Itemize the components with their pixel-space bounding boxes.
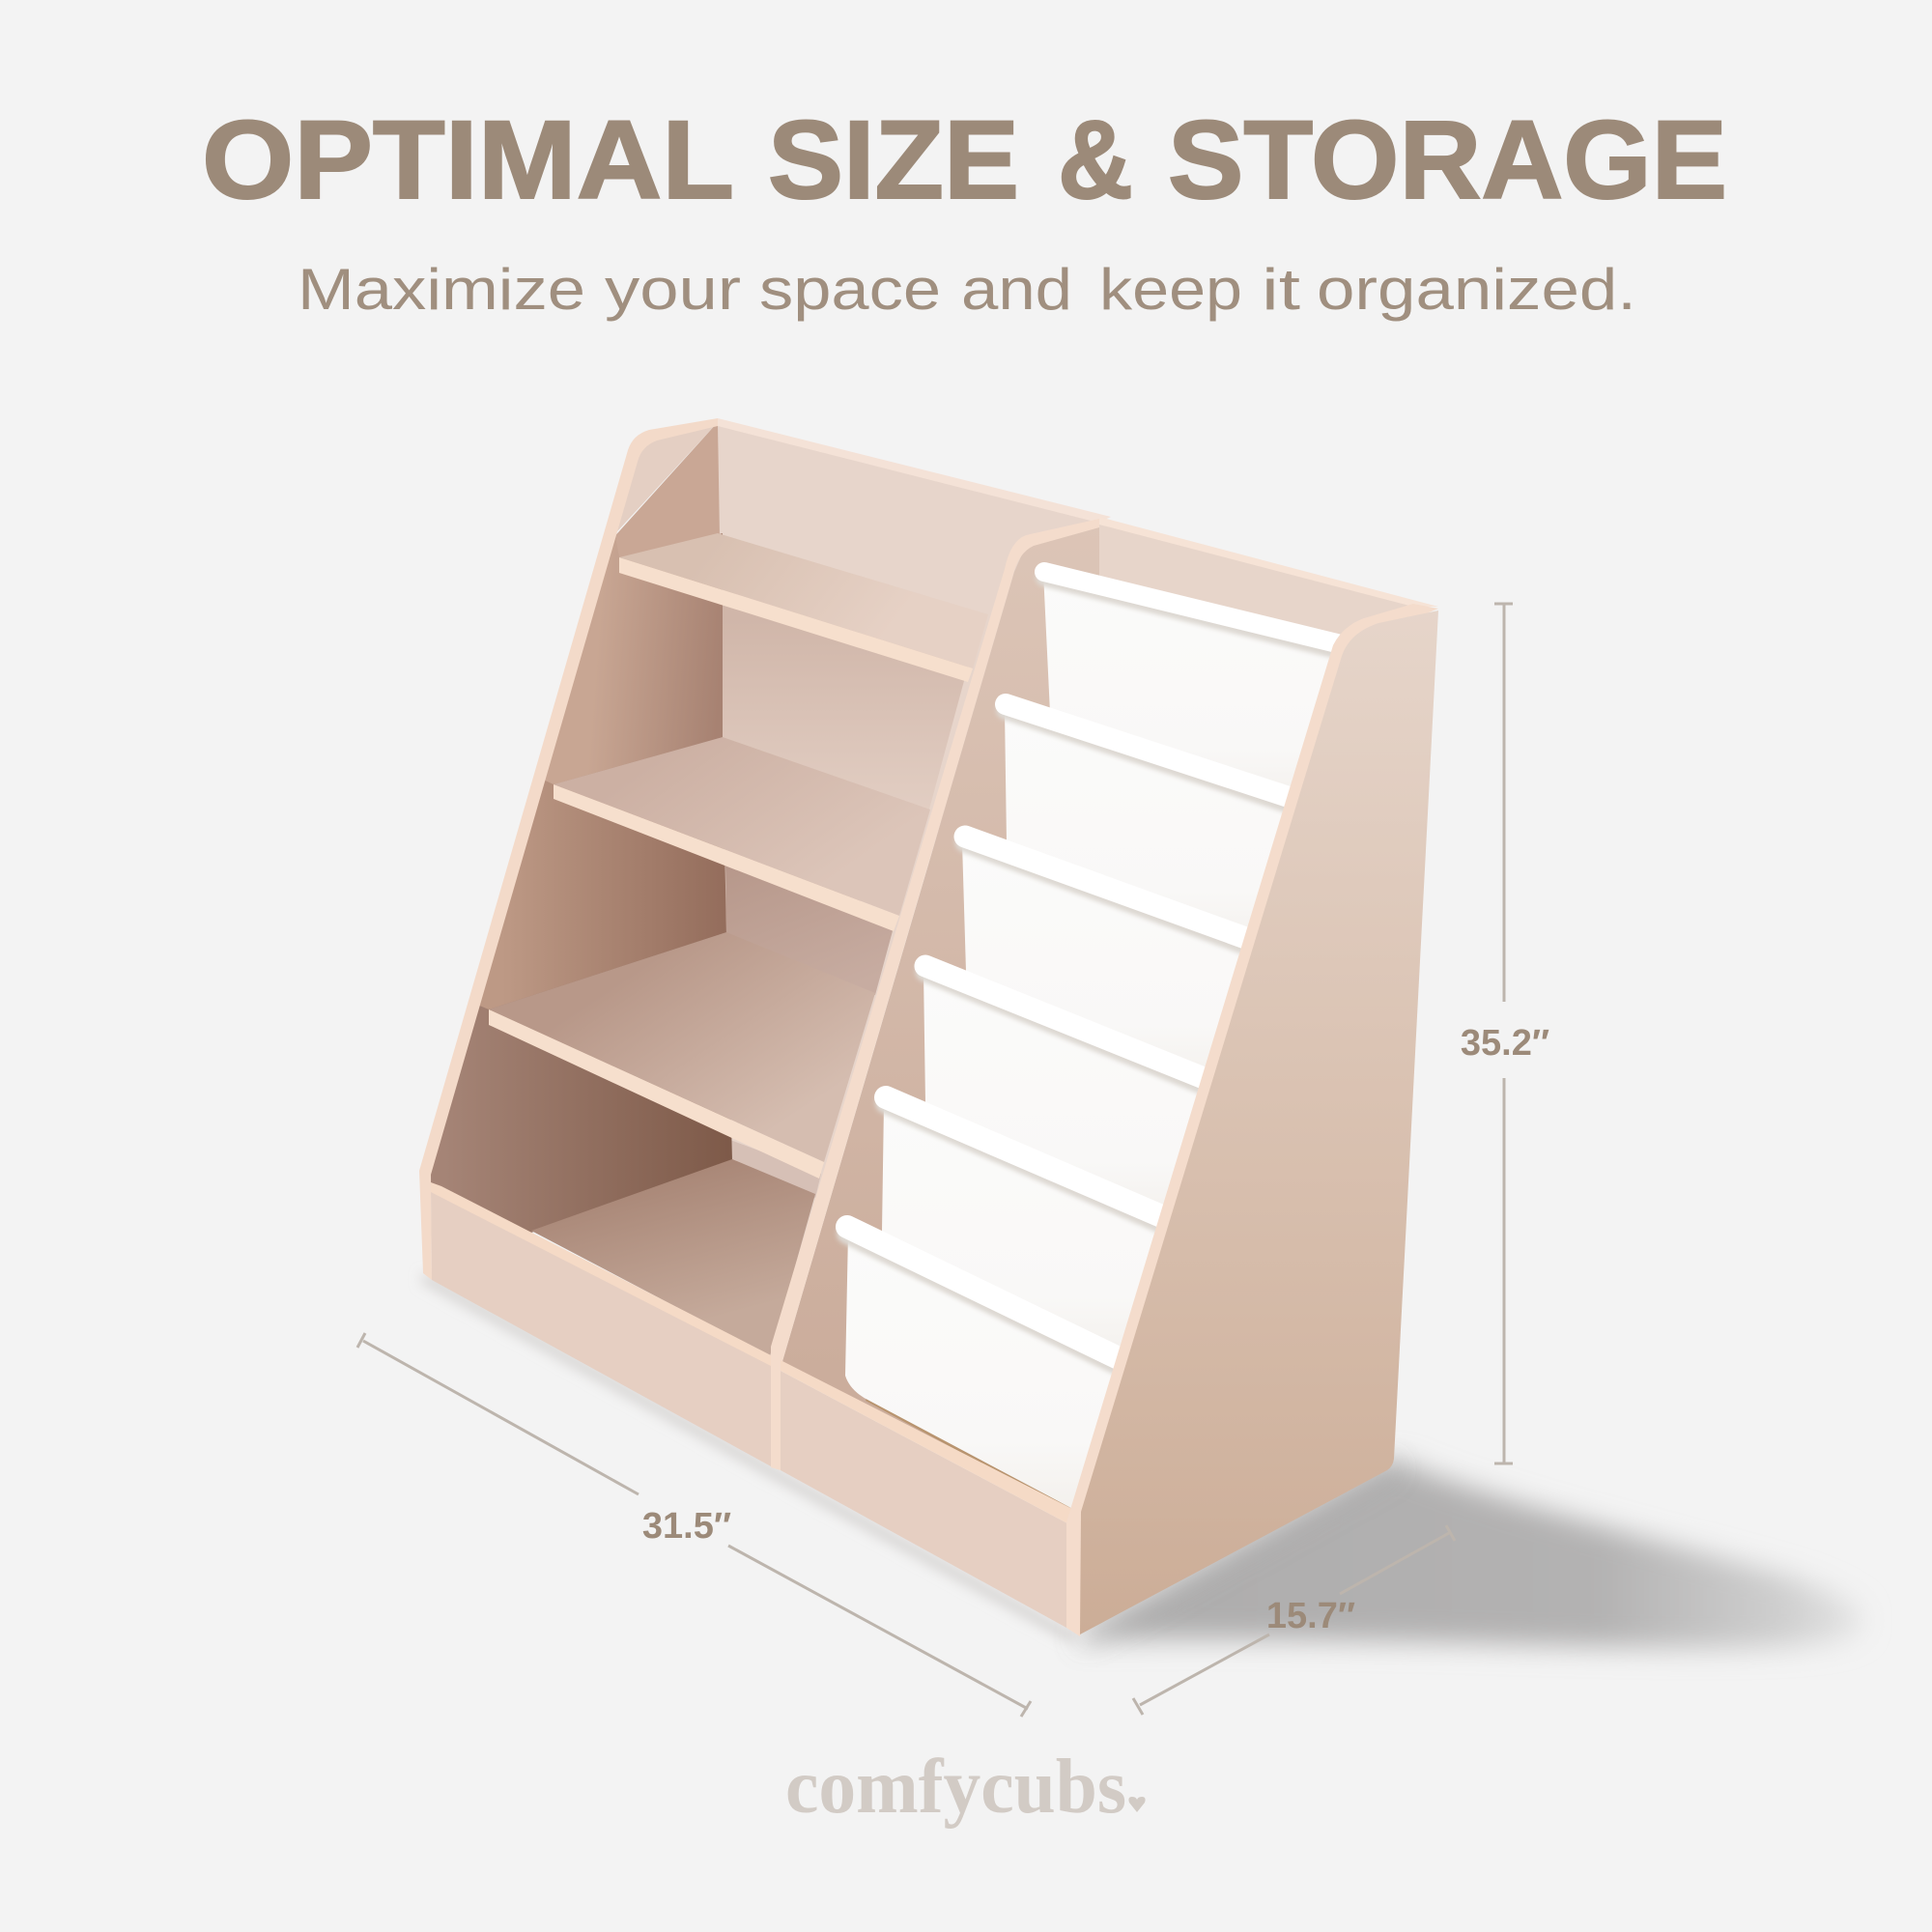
back wall section below second shelf [724,792,894,995]
subtitle: organized. [1317,257,1636,322]
left unit back wall [718,422,1098,1372]
back wall section below first shelf [722,570,968,816]
icon: heart [1128,1797,1146,1812]
width dimension [357,1333,1031,1717]
title: STORAGE [1168,99,1727,222]
title: OPTIMAL [202,99,734,222]
right side panel [1080,611,1438,1634]
top rim of right unit [1099,517,1438,607]
floor of left compartment [531,1159,815,1356]
logo: comfycubs [785,1745,1126,1830]
bookshelf [419,418,1438,1636]
rod 4 [925,966,1208,1087]
title [202,99,1727,222]
subtitle: Maximize [298,257,585,322]
left side inner face [427,422,732,1233]
pocket 1 [1043,572,1337,807]
width label: 31.5″ [642,1506,731,1547]
top rim of left unit [718,418,1111,523]
rod 1 [1044,572,1337,650]
pocket 4 [923,972,1213,1225]
right unit back wall [1024,523,1413,802]
subtitle: it [1262,257,1300,322]
center divider edge strip [771,519,1099,1470]
depth label: 15.7″ [1266,1596,1355,1636]
pocket 5 [882,1103,1171,1362]
subtitle [298,257,1636,322]
left front board [431,1182,771,1466]
pocket 6 [845,1232,1128,1512]
fabric pockets [845,572,1337,1512]
depth dimension [1133,1525,1455,1715]
cork base behind fabric [866,1391,1072,1511]
height label: 35.2″ [1461,1023,1549,1064]
subtitle: space [759,257,941,322]
subtitle: keep [1099,257,1242,322]
subtitle: your [605,257,741,322]
title: & [1058,99,1133,222]
right side edge strip [1066,604,1438,1636]
rod 6 [847,1227,1122,1367]
rod 3 [965,837,1251,947]
right front board [781,1360,1074,1628]
shelf 3 [489,932,875,1179]
right unit inner face [781,523,1099,1521]
pocket 3 [962,842,1256,1087]
shelf 1 [619,533,988,682]
shelf 2 [554,737,930,931]
title: SIZE [768,99,1019,222]
pocket 2 [1005,710,1299,952]
left side edge strip [419,418,718,1280]
back wall section below third shelf [730,1140,821,1198]
rod 2 [1006,704,1294,806]
floor shadow [423,1277,1862,1648]
rod 5 [886,1097,1166,1225]
subtitle: and [961,257,1072,322]
